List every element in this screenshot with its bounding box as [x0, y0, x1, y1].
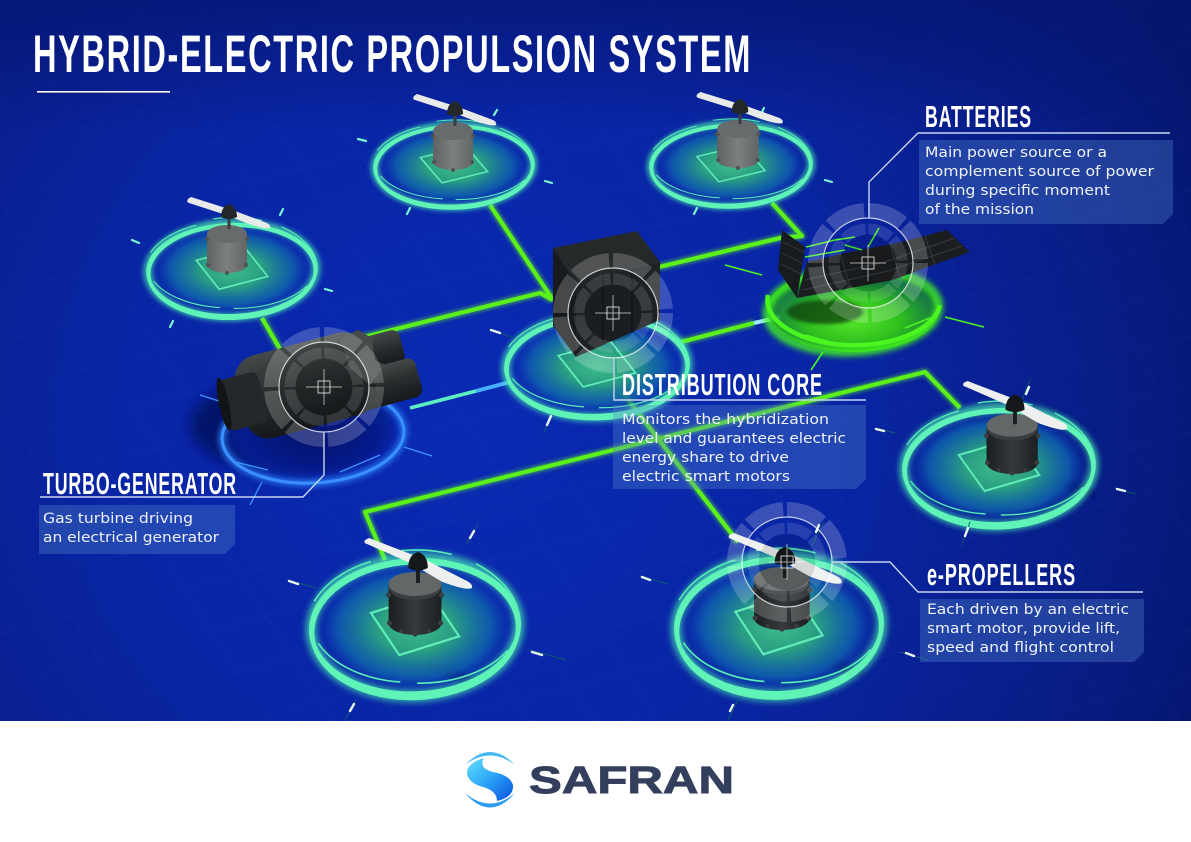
- distribution core pad: [504, 309, 690, 422]
- callout: e-propellers: smart motor, provide lift,: [927, 621, 1120, 637]
- turbo-generator pad: [190, 377, 432, 505]
- shadows under propellers: [340, 476, 1097, 686]
- e-propeller pad bottom right: [674, 548, 884, 701]
- e-propeller pad left: [146, 217, 318, 321]
- callout: distribution core: DISTRIBUTION CORE: [622, 367, 823, 402]
- callout: batteries: BATTERIES: [925, 99, 1032, 134]
- connection lines: [262, 203, 960, 560]
- e-propeller motor top left: [413, 94, 496, 172]
- logo S emblem: [465, 752, 515, 808]
- tick marks: [132, 108, 1135, 720]
- callout: distribution core: energy share to drive: [622, 450, 789, 466]
- e-propeller motor right: [963, 381, 1067, 476]
- callout: turbo-generator: [39, 432, 324, 554]
- target reticle: e-propellers: [734, 510, 840, 614]
- callout: batteries: of the mission: [925, 202, 1034, 218]
- callout: e-propellers: Each driven by an electric: [927, 602, 1129, 618]
- title: HYBRID-ELECTRIC PROPULSION SYSTEM: [33, 25, 752, 84]
- callout: batteries: Main power source or a: [925, 145, 1107, 161]
- e-propeller pad bottom left: [309, 550, 521, 702]
- target reticle: distribution core: [560, 260, 666, 366]
- Safran logo: SAFRAN: [529, 760, 734, 802]
- battery pack: [778, 228, 970, 298]
- Safran logo: [465, 752, 734, 808]
- e-propeller motor top right: [697, 92, 783, 170]
- callout: e-propellers: e-PROPELLERS: [927, 557, 1076, 592]
- e-propeller motor left: [187, 197, 270, 275]
- e-propeller motor bottom right: [729, 533, 842, 632]
- target reticle: turbo-generator: [272, 334, 376, 440]
- turbo-generator machine: [213, 327, 424, 444]
- callout: distribution core: electric smart motors: [622, 469, 790, 485]
- target reticle: batteries: [816, 210, 920, 316]
- e-propeller pad top left: [373, 120, 535, 211]
- callout: turbo-generator: Gas turbine driving: [43, 511, 193, 527]
- distribution core cube: [553, 231, 660, 357]
- callout: e-propellers: speed and flight control: [927, 640, 1114, 656]
- callout: e-propellers: [832, 557, 1144, 662]
- e-propeller pad right: [902, 401, 1096, 531]
- callout: turbo-generator: TURBO-GENERATOR: [43, 466, 237, 501]
- callout: batteries: [869, 99, 1173, 224]
- callout: distribution core: Monitors the hybridization: [622, 412, 829, 428]
- callout: batteries: during specific moment: [925, 183, 1110, 199]
- callout: turbo-generator: an electrical generator: [43, 530, 219, 546]
- e-propeller pad top right: [649, 119, 813, 210]
- e-propeller motor bottom left: [364, 538, 472, 637]
- battery pad: [725, 264, 984, 370]
- callout: distribution core: [613, 358, 866, 489]
- title underline: [37, 91, 170, 93]
- footer band: [0, 721, 1191, 842]
- callout: distribution core: level and guarantees electric: [622, 431, 846, 447]
- callout: batteries: complement source of power: [925, 164, 1154, 180]
